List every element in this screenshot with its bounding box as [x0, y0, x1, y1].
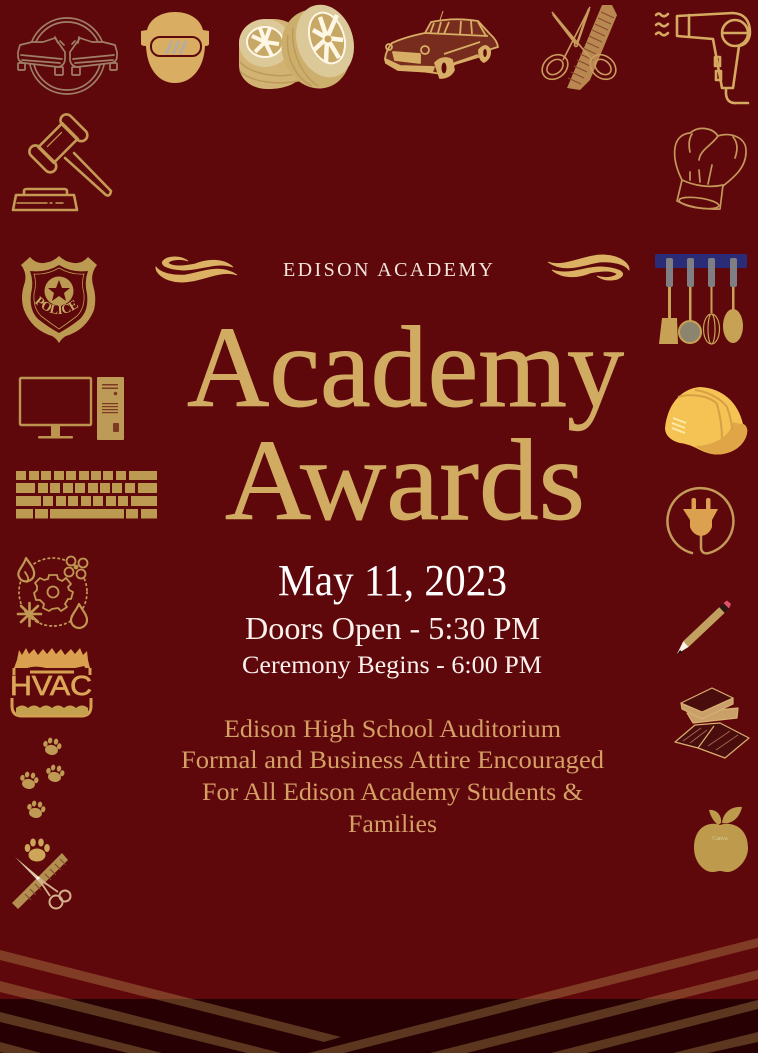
- icon: paw prints: [19, 737, 66, 819]
- icon: HVAC logo: [10, 648, 92, 716]
- icon: apple: Canva: [712, 836, 728, 842]
- footer band with diagonal stripes: [0, 938, 758, 1053]
- icon: kitchen utensils: [655, 254, 747, 344]
- event details: Edison High School Auditorium: [224, 716, 562, 743]
- event date and times: May 11, 2023: [278, 556, 507, 605]
- event details: [181, 716, 605, 838]
- icon: heating and cooling gear: [18, 556, 88, 628]
- icon: desktop computer: [20, 377, 124, 440]
- ornament: right flourish: [548, 255, 629, 280]
- icon: books: [675, 688, 749, 758]
- icon: keyboard: [16, 471, 157, 518]
- icon: gavel: [13, 112, 111, 210]
- title: [187, 304, 624, 545]
- icon: electric plug: [667, 488, 733, 553]
- ornament: left flourish: [156, 257, 237, 282]
- icon: chef hat: [675, 128, 746, 211]
- event date and times: Ceremony Begins - 6:00 PM: [242, 652, 542, 679]
- icon: classic car: [385, 11, 498, 78]
- icon: pencil: [677, 600, 731, 654]
- icon: apple: [694, 807, 748, 872]
- title: Awards: [225, 417, 585, 545]
- icon: welding mask: [141, 12, 209, 83]
- event details: Formal and Business Attire Encouraged: [181, 747, 605, 774]
- title: Academy: [187, 304, 624, 432]
- event details: For All Edison Academy Students &: [202, 779, 583, 806]
- icon: grooming paw with comb and scissors: [12, 838, 70, 909]
- icon: car crash: [18, 18, 117, 94]
- event date and times: Doors Open - 5:30 PM: [245, 610, 540, 646]
- event details: Families: [348, 811, 437, 838]
- heading: Edison Academy: EDISON ACADEMY: [283, 259, 493, 281]
- icon: police badge: [21, 256, 97, 343]
- icon: police badge: POLICE: [34, 296, 78, 314]
- icon: stacked tires: [239, 0, 363, 98]
- icon: hair dryer: [656, 13, 750, 103]
- icon: HVAC logo: HVAC: [10, 670, 92, 701]
- event date and times: [242, 556, 542, 679]
- icon: hard hat: [665, 387, 747, 454]
- icon: scissors and comb: [537, 5, 621, 90]
